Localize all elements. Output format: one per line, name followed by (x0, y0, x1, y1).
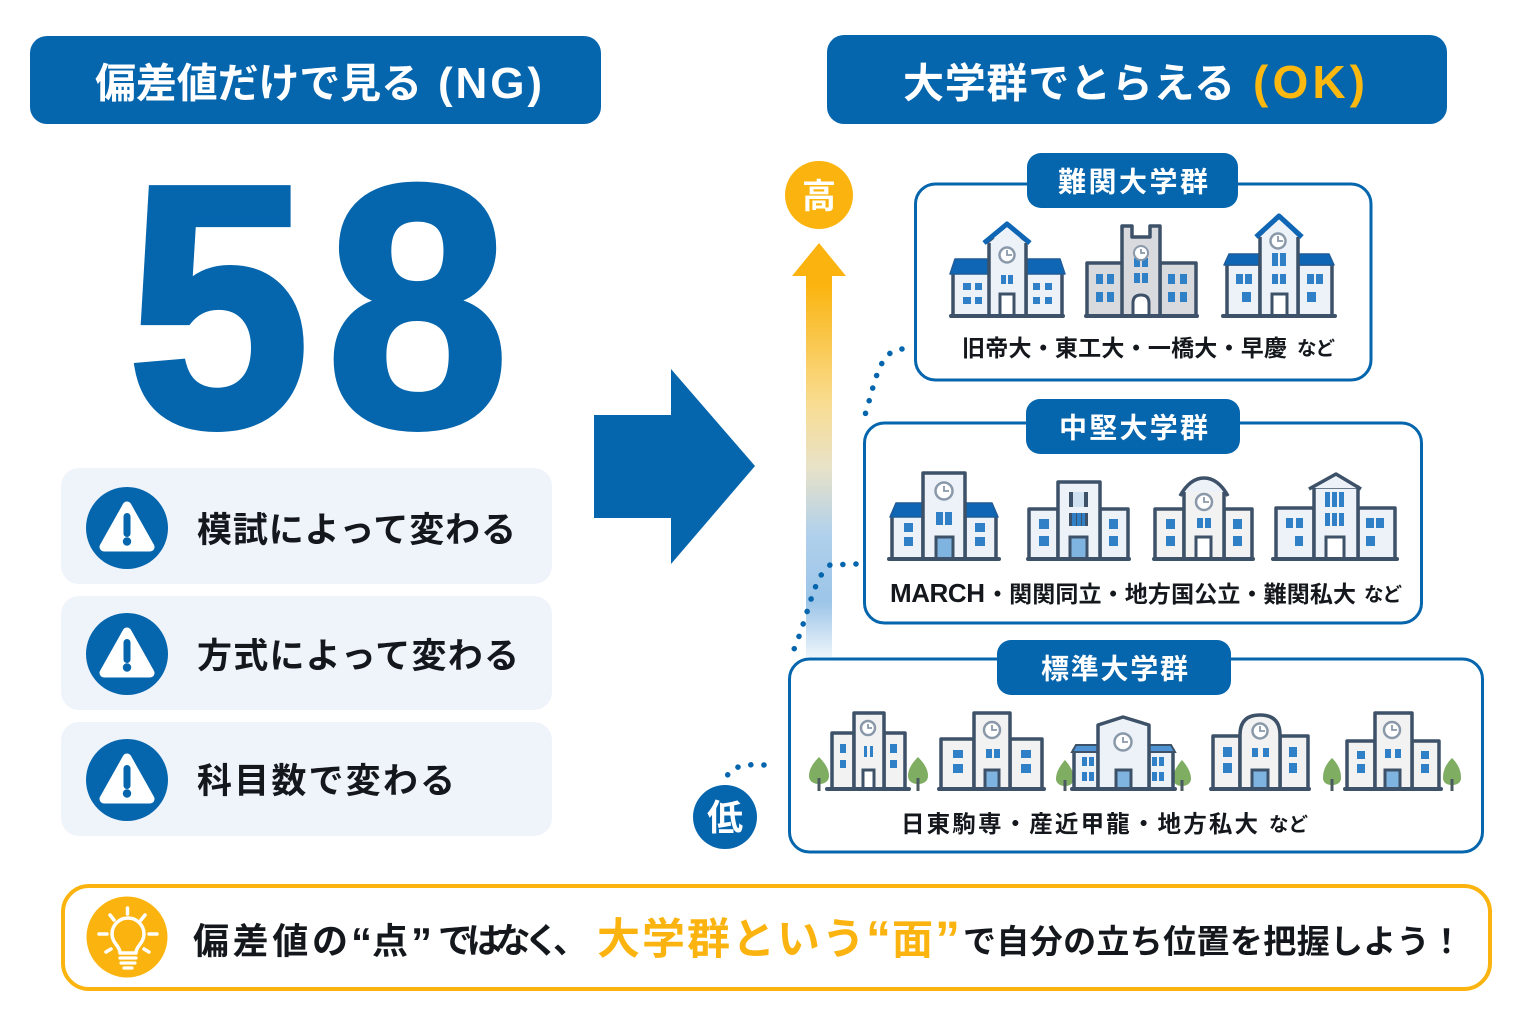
warning row: method (61, 596, 552, 710)
label: high (785, 161, 853, 229)
heading: NG: 偏差値だけで見る (95, 60, 422, 106)
callout: bottom message (63, 886, 1490, 989)
heading: OK: 大学群でとらえる (903, 60, 1235, 106)
icon: building 12 with trees (1323, 713, 1461, 791)
heading: OK: (OK) (1253, 56, 1365, 108)
dotted connector: bottom (727, 765, 764, 776)
icon: building 3 (1223, 216, 1335, 316)
label: low (693, 785, 757, 849)
icon: building 7 (1273, 474, 1397, 559)
tier universities: MARCH (890, 578, 985, 608)
dotted connector: middle (791, 564, 856, 656)
message text (193, 911, 1463, 967)
icon: light bulb (86, 896, 168, 978)
icon: building 1 (950, 224, 1065, 316)
icon: building 5 (1028, 482, 1129, 559)
tier universities (890, 578, 1402, 608)
row text: 模試によって変わる (197, 511, 516, 550)
tier label: 標準大学群 (1041, 654, 1188, 684)
icon: building 6 (1154, 478, 1253, 559)
tier universities: 日東駒専・産近甲龍・地方私大 (901, 811, 1258, 837)
panel: bottom tier (790, 640, 1482, 852)
tier label: 中堅大学群 (1059, 412, 1208, 444)
icon: building 11 (1211, 715, 1309, 789)
label: low: 低 (707, 797, 743, 838)
big number 58: 58 (128, 115, 509, 499)
message text: 偏差値の (193, 920, 348, 962)
icon: warning (86, 739, 168, 821)
message text: で自分の立ち位置を把握しよう！ (963, 923, 1463, 960)
icon: building 2 (1086, 226, 1197, 316)
tier universities: など (1364, 584, 1402, 606)
row text: 科目数で変わる (197, 762, 455, 801)
icon: warning (86, 487, 168, 569)
message text: “ (866, 911, 891, 967)
warning row: subjects (61, 722, 552, 836)
message text: “ (351, 919, 372, 966)
dotted connector: top (864, 349, 902, 418)
heading: NG (30, 36, 601, 124)
tier universities: 旧帝大・東工大・一橋大・早慶 (962, 335, 1287, 361)
heading: NG: (NG) (438, 59, 542, 108)
message text: 点 (372, 920, 408, 962)
tier label (997, 640, 1231, 695)
arrow: big right (594, 369, 755, 564)
row text: 方式によって変わる (197, 637, 519, 676)
message text: 大学群という (597, 916, 865, 964)
arrow: vertical gradient scale (792, 243, 846, 657)
warning row: mock exam (61, 468, 552, 584)
tier universities: など (1269, 814, 1308, 836)
tier universities: など (1297, 338, 1335, 360)
icon: building 8 with trees (809, 713, 928, 791)
icon: warning (86, 613, 168, 695)
message text: 面 (892, 917, 933, 963)
tier label: 難関大学群 (1058, 166, 1208, 198)
label: high: 高 (802, 178, 836, 216)
icon: building 4 (889, 473, 999, 559)
message text: ではなく、 (438, 922, 588, 961)
message text: ” (411, 919, 432, 966)
icon: building 10 with trees (1056, 717, 1191, 791)
panel: top tier (916, 153, 1371, 380)
tier label (1027, 153, 1238, 208)
panel: middle tier (864, 399, 1422, 623)
heading: OK (827, 35, 1447, 124)
message text: ” (935, 911, 960, 967)
tier universities: ・関関同立・地方国公立・難関私大 (986, 581, 1356, 607)
icon: building 9 (939, 713, 1044, 789)
tier label (1026, 399, 1240, 454)
